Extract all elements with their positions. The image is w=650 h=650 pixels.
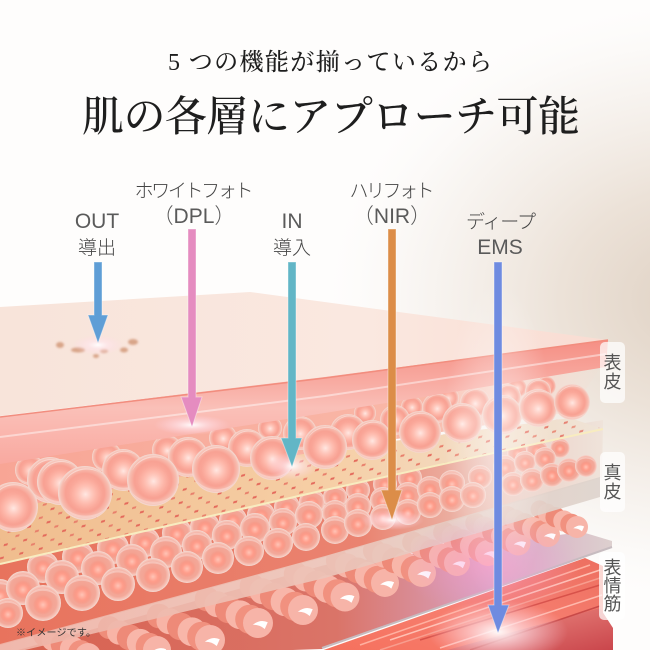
tag: dermis [600, 452, 625, 512]
membrane between dermis and muscle [0, 477, 600, 650]
layer: epidermis [0, 292, 608, 464]
tag: facial muscle [599, 552, 625, 620]
label: deep EMS [466, 211, 536, 259]
arrow: OUT [88, 262, 108, 343]
label: NIR: （NIR） [353, 205, 431, 228]
dotted dermis sheet [0, 418, 603, 564]
label: DPL [134, 181, 254, 228]
label: IN [273, 210, 311, 259]
label: OUT [75, 210, 119, 259]
tag: epidermis [600, 342, 625, 403]
label: OUT: OUT [75, 210, 119, 233]
arrow: DPL [181, 229, 202, 427]
arrow: NIR [381, 229, 402, 520]
label: IN: 導入 [273, 237, 311, 259]
label: OUT: 導出 [78, 237, 116, 259]
tag: facial muscle: 表 [604, 558, 622, 578]
dermis spheres [0, 438, 597, 628]
light glows [73, 280, 580, 650]
subtitle: 5 つの機能が揃っているから [168, 49, 492, 76]
tag: epidermis: 皮 [604, 372, 622, 392]
label: DPL: ホワイトフォト [134, 181, 254, 202]
tag: dermis: 皮 [604, 482, 622, 502]
label: DPL: （DPL） [153, 205, 235, 228]
label: IN: IN [282, 210, 302, 233]
label: NIR [350, 181, 434, 228]
note: ※イメージです。 [16, 627, 96, 639]
salmon haze behind collagen [0, 360, 606, 510]
layer: dermis base [0, 420, 603, 645]
layer: fascia sheet [0, 532, 612, 650]
tag: epidermis: 表 [604, 353, 622, 373]
tag: dermis: 真 [604, 463, 622, 483]
title: 肌の各層にアプローチ可能 [82, 94, 580, 141]
label: deep EMS: ディープ [466, 211, 536, 233]
arrow: IN [281, 262, 302, 467]
tag: facial muscle: 筋 [604, 594, 622, 614]
tag: facial muscle: 情 [604, 576, 622, 596]
label: deep EMS: EMS [477, 236, 523, 259]
muscle fibre strands [33, 500, 588, 650]
layer: facial muscle [318, 558, 613, 650]
collagen spheres [0, 376, 590, 532]
arrow: EMS [488, 262, 509, 633]
spots on skin [56, 339, 138, 358]
label: NIR: ハリフォト [350, 181, 434, 202]
